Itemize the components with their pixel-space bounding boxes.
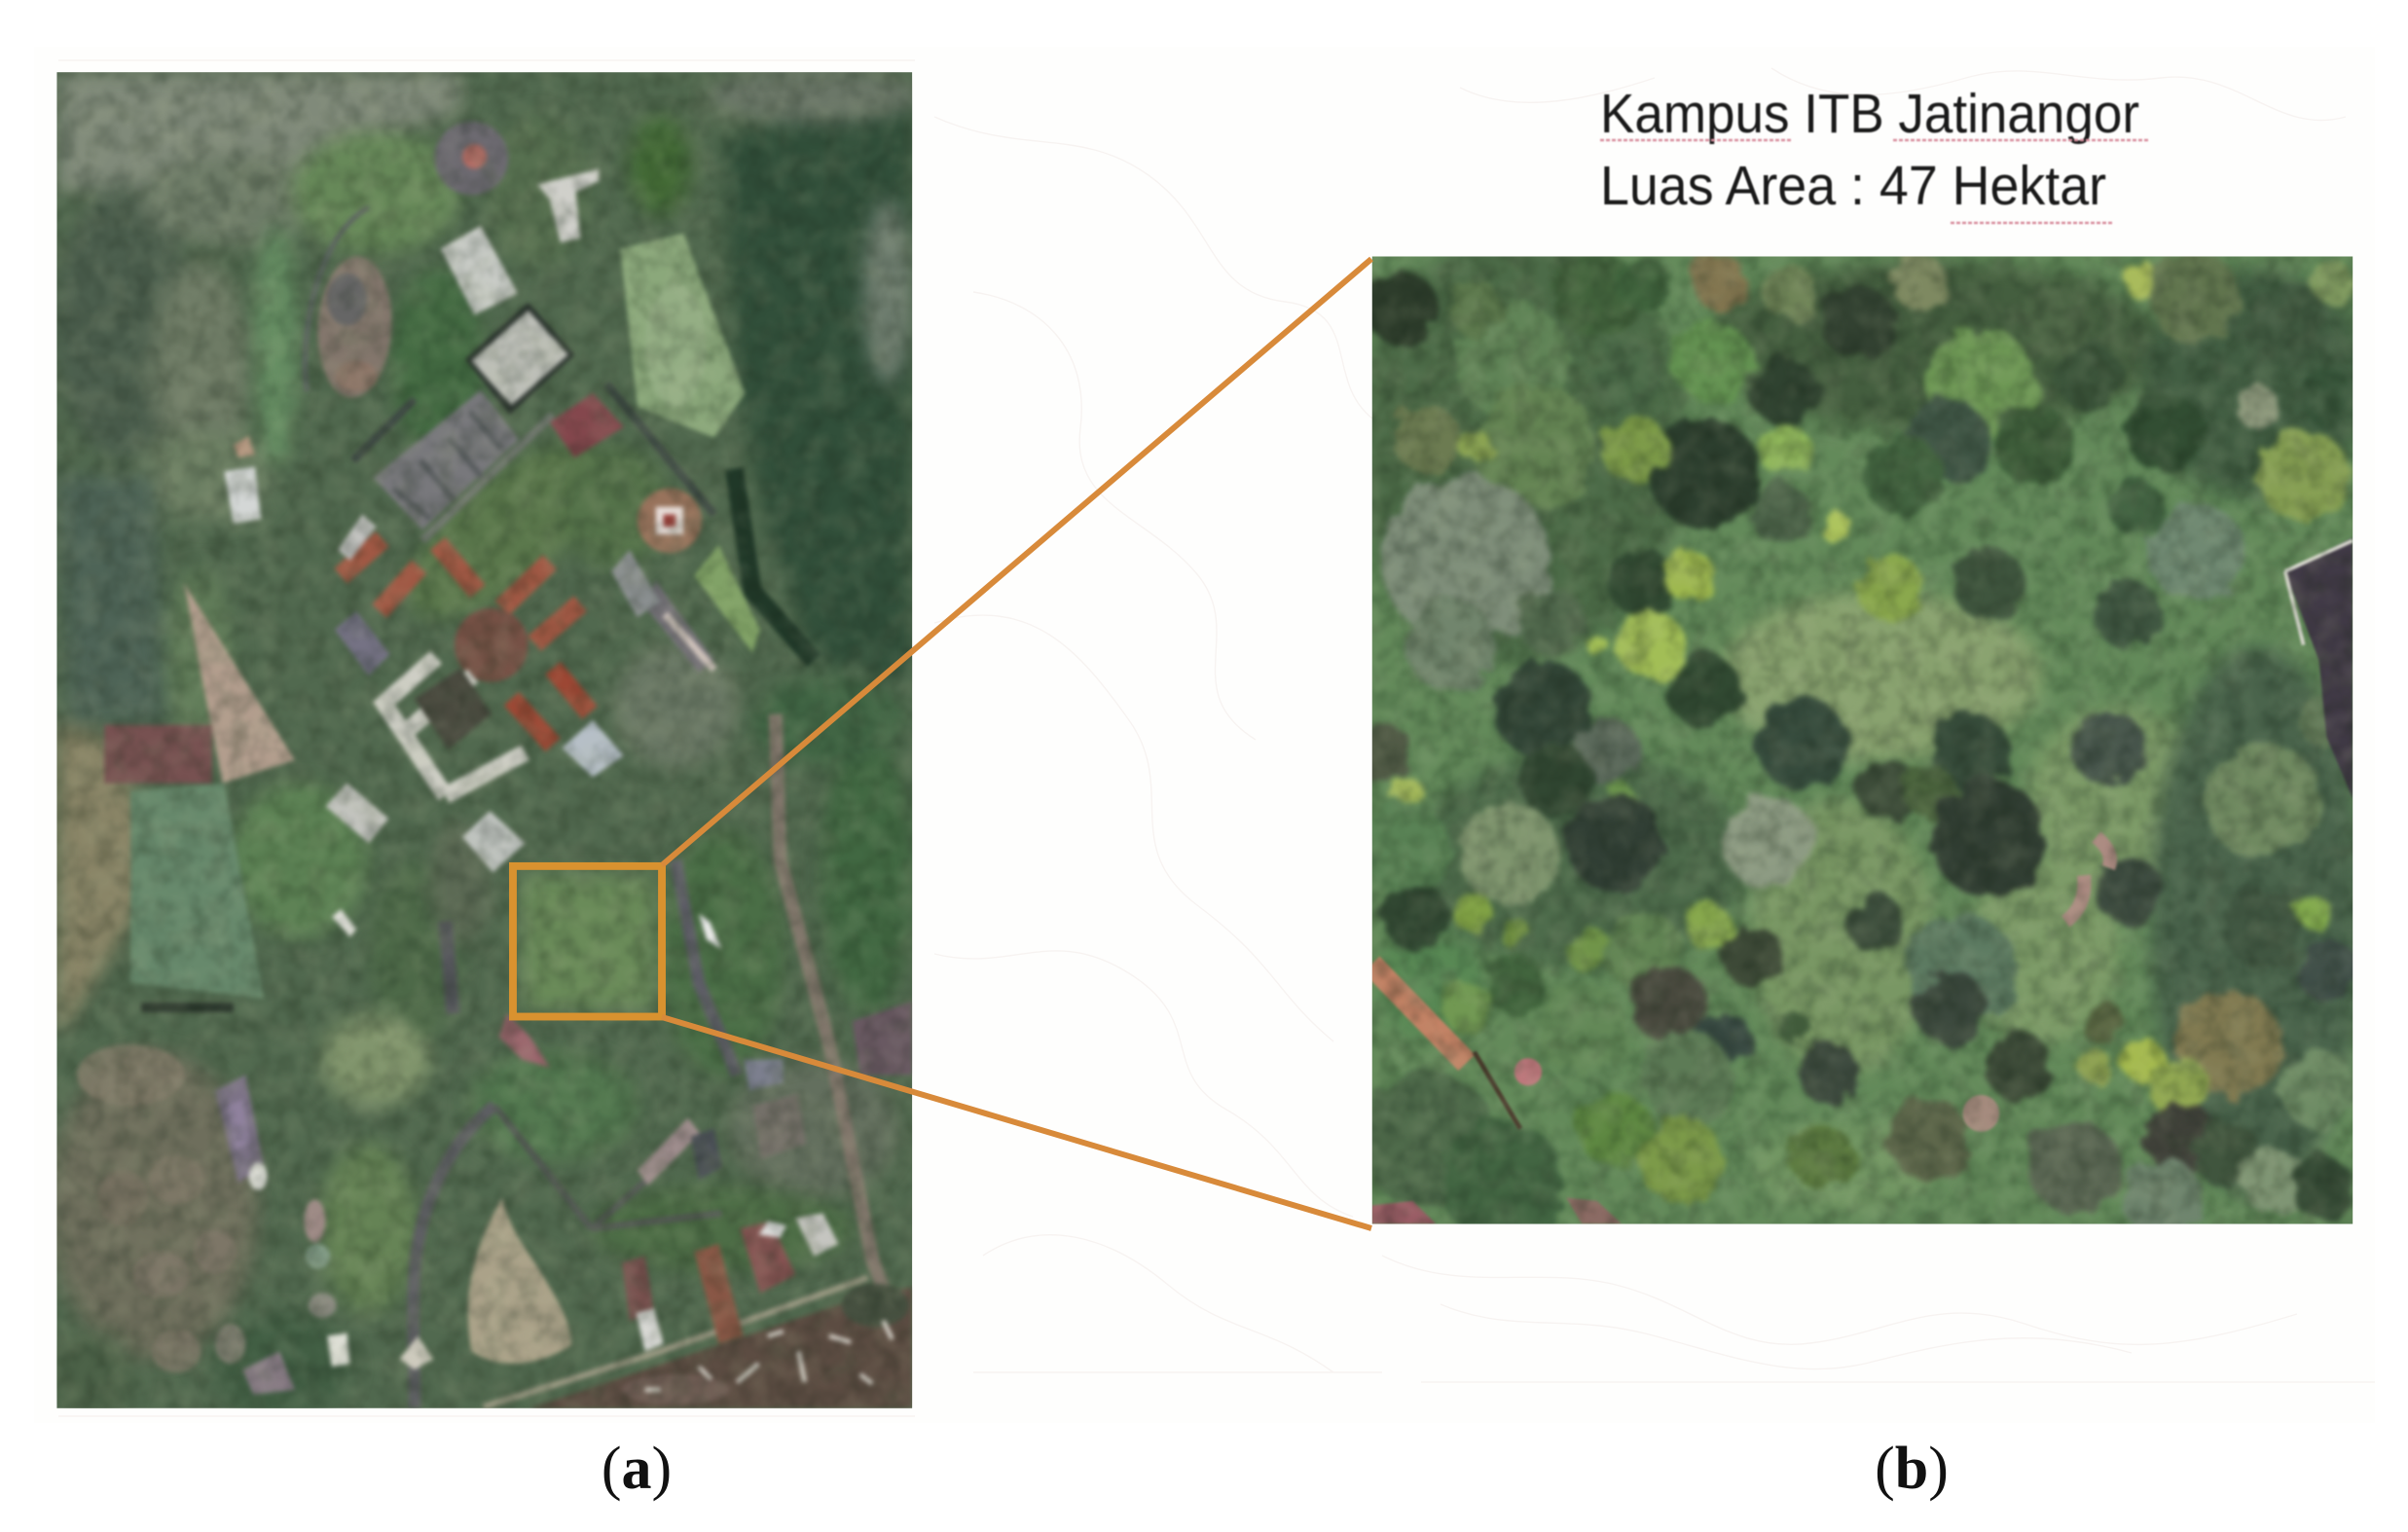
terrain patches: vegetation, fields and forest [49, 67, 922, 1420]
campus area: Luas Area : 47 Hektar [1600, 155, 2106, 217]
red and white roof square [638, 489, 702, 553]
caption a: (a) [602, 1436, 672, 1502]
orange selection square [513, 866, 662, 1017]
photo texture [56, 72, 912, 1408]
riverside town at bottom right [529, 1287, 912, 1408]
pink and purple building cluster [853, 1002, 912, 1075]
panel a: aerial photo of the whole campus [49, 67, 922, 1420]
campus name: Kampus ITB Jatinangor [1600, 83, 2139, 145]
photo texture [1371, 256, 2354, 1225]
spell-check underlines [1600, 140, 2148, 223]
grass clearing and dense canopy shade [1351, 231, 2373, 1213]
service road [776, 714, 898, 1329]
pond [468, 1198, 571, 1364]
red-roofed lecture buildings [341, 539, 590, 745]
lower left blotches [77, 1044, 184, 1106]
arrow: upper zoom connector [662, 259, 1371, 865]
caption b: (b) [1875, 1436, 1949, 1502]
arrow: lower zoom connector [662, 1017, 1371, 1228]
panel b: zoomed aerial photo of tree canopy [1351, 231, 2373, 1244]
tree canopies [1351, 252, 2359, 1244]
pink paths and roof corner [1371, 537, 2353, 1224]
buildings, roads and pond details [77, 122, 912, 1408]
lower right houses [622, 1257, 654, 1321]
helipad circle [435, 122, 508, 195]
white courtyard building [383, 657, 526, 795]
heading: campus name and area [1600, 83, 2148, 223]
curved campus road [414, 1106, 494, 1408]
